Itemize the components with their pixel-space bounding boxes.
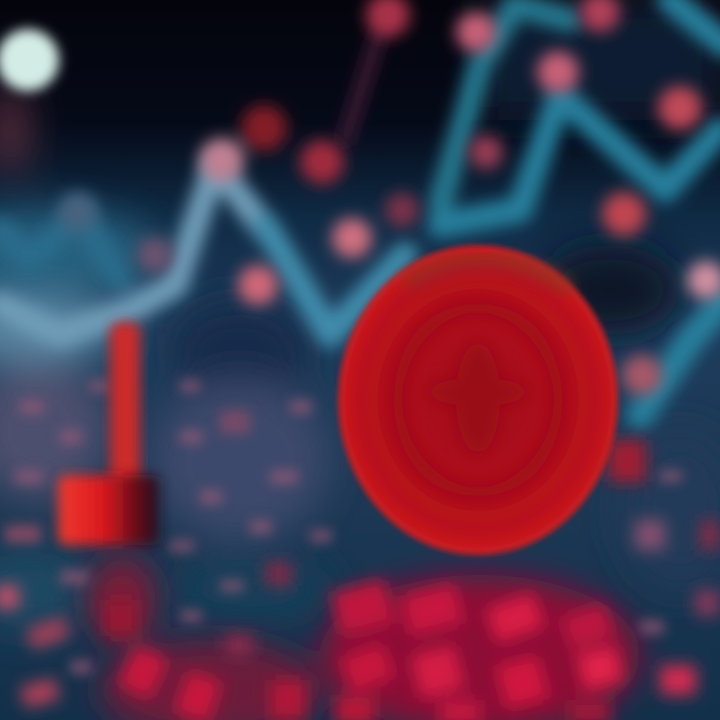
line: center zigzag: [265, 225, 405, 335]
bar base: [58, 475, 160, 545]
coin body: [338, 245, 618, 555]
red bar with base: [58, 322, 160, 545]
bottom red haze: [88, 556, 640, 720]
chart data points: [58, 0, 720, 395]
line: right zigzag: [440, 95, 720, 225]
line: pale left ridge: [0, 165, 270, 335]
line: lower right rise: [640, 300, 720, 415]
line: left low hills: [0, 215, 120, 280]
line: top right corner: [670, 0, 720, 45]
red coin: [338, 245, 618, 555]
coin top edge: [405, 261, 570, 290]
chart lines: [0, 0, 720, 415]
moon: [0, 29, 59, 91]
bar stem: [110, 322, 140, 487]
line: tall rise: [440, 5, 570, 205]
scattered pink speckles: [5, 380, 682, 674]
bottom red tiles: [0, 440, 720, 720]
coin inner rings: [360, 270, 596, 530]
line: faint red stem: [345, 15, 385, 140]
